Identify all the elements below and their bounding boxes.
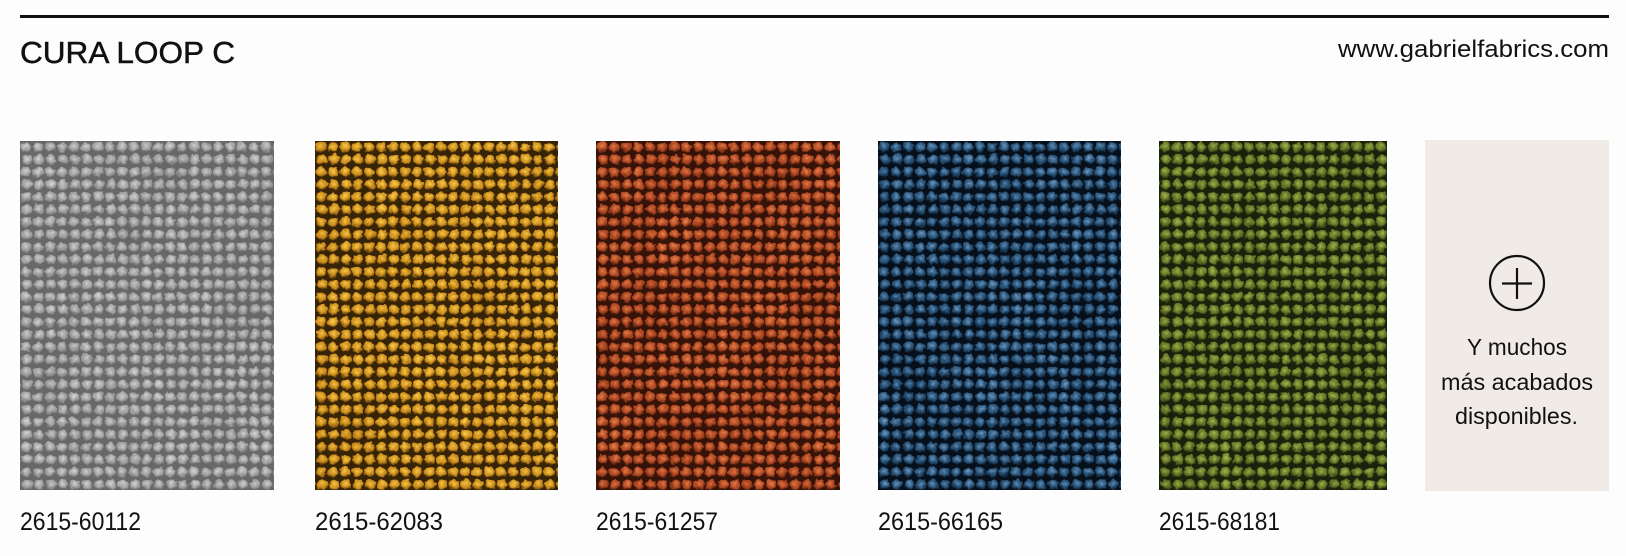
- panel text: más acabados: [1441, 369, 1593, 395]
- code label: 2615-60112: 2615-60112: [20, 508, 141, 536]
- title: CURA LOOP C: [20, 35, 235, 70]
- swatch: blue fabric 2615-66165: [868, 131, 1131, 536]
- code label: 2615-66165: 2615-66165: [878, 508, 1003, 536]
- icon: circled plus: [1490, 256, 1544, 310]
- code label: 2615-61257: 2615-61257: [596, 508, 718, 536]
- header rule: [20, 15, 1609, 18]
- panel text: [1441, 334, 1593, 429]
- swatch: rust fabric 2615-61257: [586, 131, 850, 536]
- code label: 2615-62083: 2615-62083: [315, 508, 443, 536]
- panel: more finishes available: [1425, 140, 1609, 491]
- swatch: grey fabric 2615-60112: [10, 131, 284, 536]
- code label: 2615-68181: 2615-68181: [1159, 508, 1280, 536]
- swatch: green fabric 2615-68181: [1149, 131, 1397, 536]
- panel text: Y muchos: [1467, 334, 1567, 360]
- panel text: disponibles.: [1455, 403, 1578, 429]
- website url: www.gabrielfabrics.com: [1337, 36, 1609, 63]
- swatch: yellow fabric 2615-62083: [305, 131, 568, 536]
